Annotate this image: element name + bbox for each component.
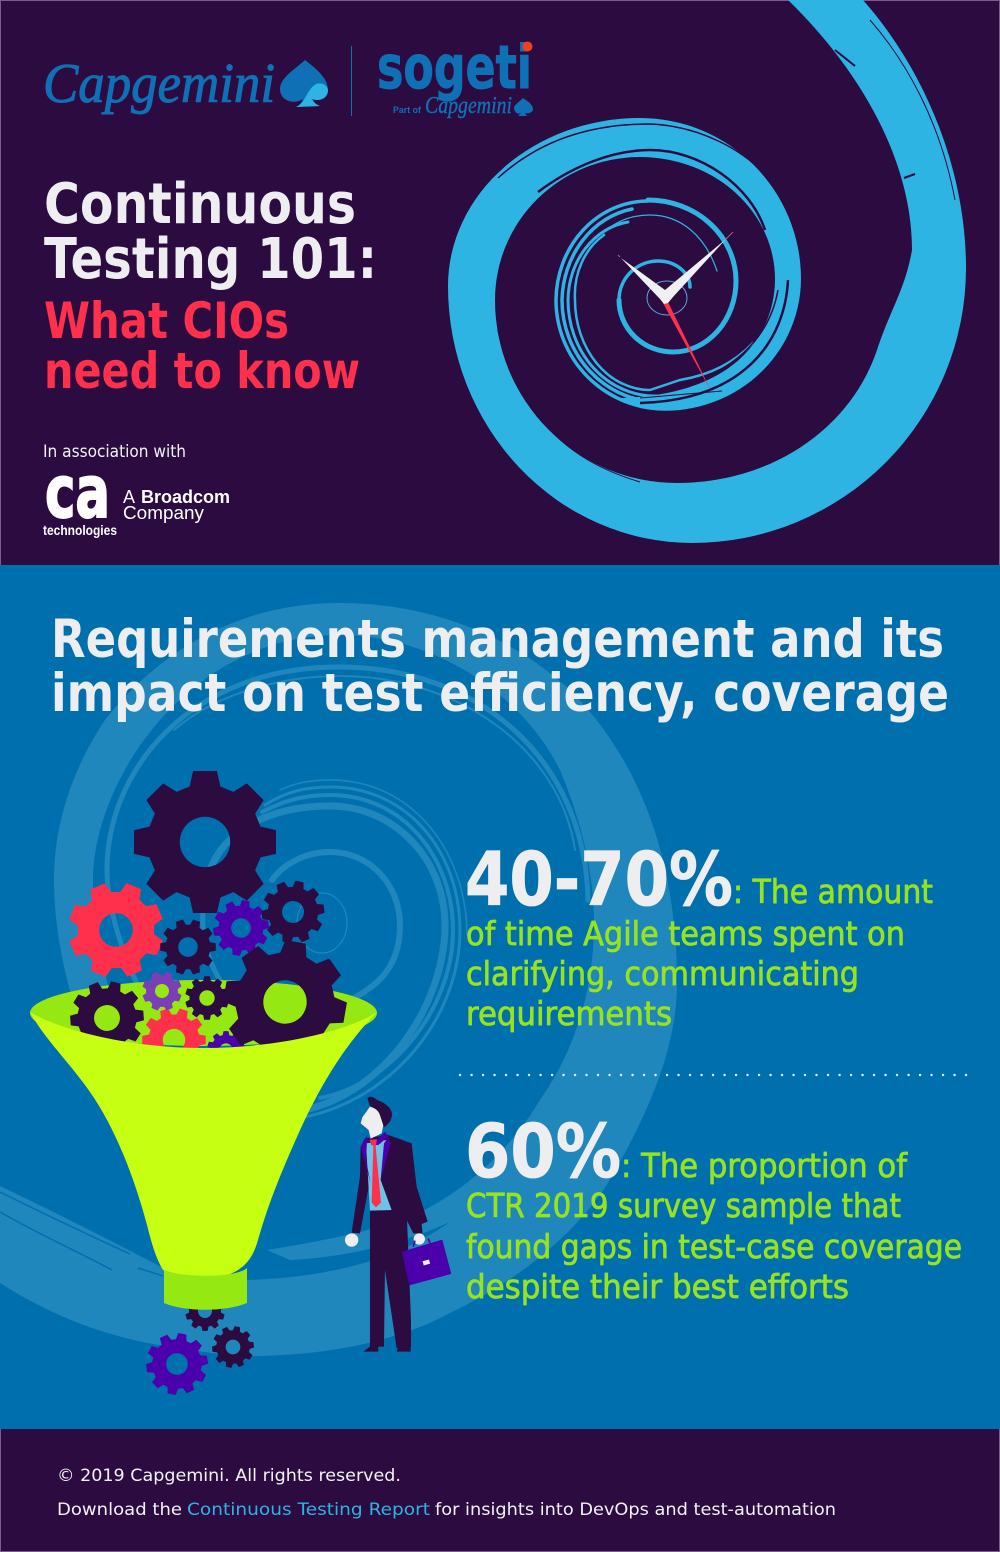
footer: © 2019 Capgemini. All rights reserved. <box>57 1466 401 1486</box>
logo: CA Technologies, a Broadcom company <box>43 450 230 538</box>
gears below funnel <box>142 1322 258 1400</box>
funnel back rim <box>30 980 377 1046</box>
dark gear falling <box>208 1322 258 1372</box>
stat: 60% <box>465 1109 962 1306</box>
title <box>44 172 377 400</box>
purple gear <box>209 896 273 960</box>
stat: 40-70%: 40-70% <box>465 837 733 923</box>
stat: 60%: despite their best efforts <box>466 1267 849 1306</box>
logo: CA Technologies, a Broadcom company: technologies <box>43 522 117 538</box>
small dark gear in funnel <box>185 976 229 1020</box>
gears inside funnel <box>63 931 356 1080</box>
violet gear <box>136 965 188 1017</box>
title: Continuous <box>44 172 356 237</box>
logo: Sogeti: Capgemini <box>425 93 512 119</box>
spiral clock illustration <box>448 0 966 543</box>
logo: CA Technologies, a Broadcom company: ca <box>45 450 110 534</box>
clock hands <box>618 232 733 304</box>
footer: for insights into DevOps and test-automation <box>435 1500 836 1520</box>
footer: Continuous Testing Report <box>187 1500 430 1520</box>
logo: Sogeti: sogeti <box>377 33 532 103</box>
purple gear in funnel <box>207 1031 245 1069</box>
stat: 40-70%: of time Agile teams spent on <box>466 914 905 953</box>
stat: 60%: : The proportion of <box>621 1146 908 1185</box>
stat: 60%: 60% <box>465 1109 621 1195</box>
purple gear falling <box>142 1328 212 1400</box>
logo: Capgemini: Capgemini <box>43 53 275 115</box>
logo: CA Technologies, a Broadcom company: A <box>123 487 135 507</box>
logo: CA Technologies, a Broadcom company: Broadcom <box>141 487 230 507</box>
clock second hand <box>663 302 712 393</box>
background spiral <box>0 603 677 1356</box>
footer: Download the <box>57 1500 182 1520</box>
title: Testing 101: <box>44 227 377 292</box>
logo: CA Technologies, a Broadcom company: Company <box>123 503 204 523</box>
red gear <box>54 868 178 992</box>
dark gear at spout <box>185 1291 225 1331</box>
logo: Sogeti: Part of <box>393 105 422 115</box>
stat: 40-70% <box>465 837 933 1033</box>
panel: requirements management <box>0 565 1000 1429</box>
big dark gear in funnel <box>214 931 356 1073</box>
large dark gear <box>134 771 276 913</box>
stat: 40-70%: clarifying, communicating <box>466 954 859 993</box>
logo divider <box>351 46 352 116</box>
logo: Sogeti <box>377 33 533 119</box>
stat: 60%: CTR 2019 survey sample that <box>466 1186 901 1225</box>
gears above funnel <box>54 771 330 992</box>
businessman with briefcase <box>345 1097 450 1352</box>
title: need to know <box>44 342 360 400</box>
association label: In association with <box>43 442 186 461</box>
small dark gear <box>153 912 223 982</box>
medium dark gear <box>256 875 330 949</box>
funnel <box>30 1012 377 1277</box>
section heading <box>51 609 949 724</box>
left dark gear in funnel <box>63 974 151 1062</box>
stat: 40-70%: : The amount <box>733 872 933 911</box>
title: What CIOs <box>44 292 289 350</box>
footer <box>57 1466 836 1520</box>
funnel neck <box>164 1268 247 1310</box>
stat: 40-70%: requirements <box>466 994 672 1033</box>
stat: 60%: found gaps in test-case coverage <box>466 1227 962 1266</box>
dotted divider <box>460 1074 972 1076</box>
red gear in funnel <box>134 1000 214 1080</box>
